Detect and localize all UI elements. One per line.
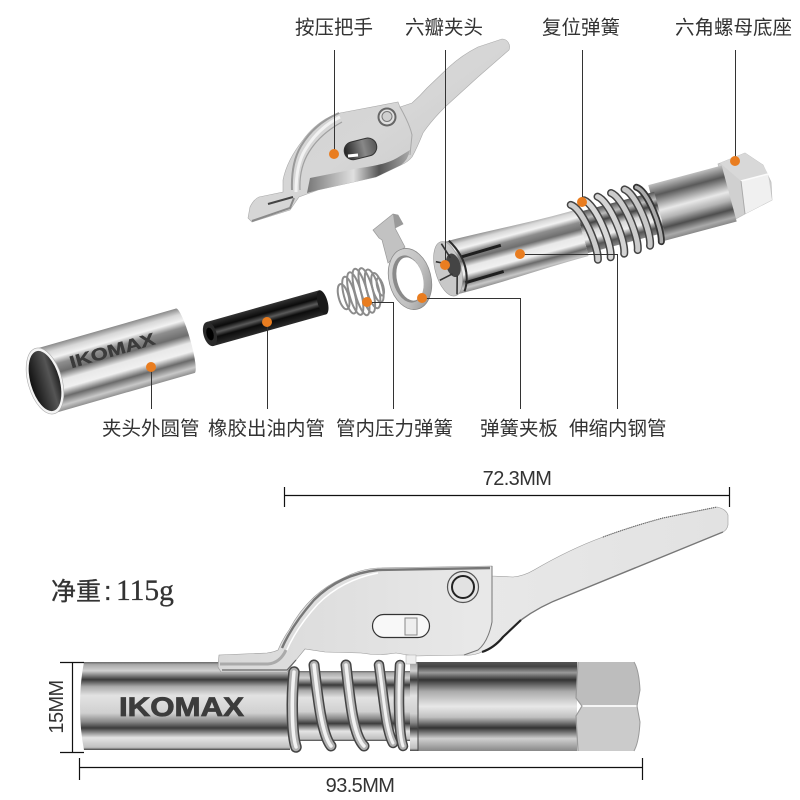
dimension: length 93.5MM: 93.5MM bbox=[326, 775, 394, 797]
top part labels: 六角螺母底座 bbox=[675, 17, 792, 39]
weight label: 115g bbox=[116, 575, 174, 607]
collet body bbox=[441, 207, 589, 295]
outer tube bbox=[80, 662, 290, 750]
exploded plunger shaft with reset spring bbox=[428, 164, 737, 302]
weight label: : bbox=[104, 576, 112, 606]
leader lines bbox=[152, 50, 736, 409]
inner shaft bbox=[290, 671, 418, 741]
thick tube bbox=[648, 165, 737, 241]
assembled handle with slot and rivet bbox=[218, 507, 728, 672]
top part labels: 按压把手 bbox=[295, 17, 373, 39]
handle slot bbox=[372, 614, 430, 638]
collet face bbox=[428, 237, 472, 299]
dimension: handle width 72.3MM: 72.3MM bbox=[483, 468, 551, 490]
rubber oil inner tube bbox=[200, 289, 331, 348]
inner pressure spring bbox=[333, 263, 389, 321]
assembled grease coupler body bbox=[80, 662, 640, 751]
exploded hex nut base bbox=[718, 153, 772, 221]
return spring coils bbox=[292, 665, 403, 747]
bottom part labels: 管内压力弹簧 bbox=[336, 418, 453, 440]
bottom part labels: 伸缩内钢管 bbox=[569, 418, 667, 440]
logo: IKOMAX bbox=[119, 692, 244, 722]
handle rivet bbox=[448, 572, 478, 602]
exploded handle: 按压把手 bbox=[248, 39, 510, 222]
callout dots bbox=[146, 149, 740, 372]
dimension: height 15MM bbox=[46, 662, 84, 753]
handle rim bbox=[296, 117, 340, 192]
handle rivet bbox=[378, 108, 396, 126]
outer collet tube with logo bbox=[19, 307, 200, 418]
handle underside bbox=[307, 150, 410, 193]
bottom part labels: 橡胶出油内管 bbox=[208, 418, 325, 440]
dimension: length 93.5MM bbox=[79, 758, 643, 797]
top part labels: 六瓣夹头 bbox=[405, 17, 483, 39]
spring clip plate bbox=[373, 214, 438, 314]
bottom part labels: 夹头外圆管 bbox=[102, 418, 200, 440]
tab below handle bbox=[406, 655, 416, 664]
collet slits bbox=[458, 245, 508, 283]
bottom part labels: 弹簧夹板 bbox=[480, 418, 558, 440]
dimension: handle width 72.3MM bbox=[284, 468, 730, 507]
bottom part labels bbox=[102, 418, 667, 440]
top part labels: 复位弹簧 bbox=[542, 17, 620, 39]
inner shaft bbox=[577, 192, 665, 253]
threaded tube bbox=[418, 662, 577, 751]
slot in handle bbox=[342, 136, 379, 162]
dimension: height 15MM: 15MM bbox=[46, 680, 68, 734]
hex end bbox=[576, 662, 640, 751]
reset spring coils bbox=[570, 183, 663, 264]
weight label: 净重 bbox=[51, 578, 101, 606]
logo: IKOMAX bbox=[67, 329, 158, 372]
top part labels bbox=[295, 17, 792, 39]
